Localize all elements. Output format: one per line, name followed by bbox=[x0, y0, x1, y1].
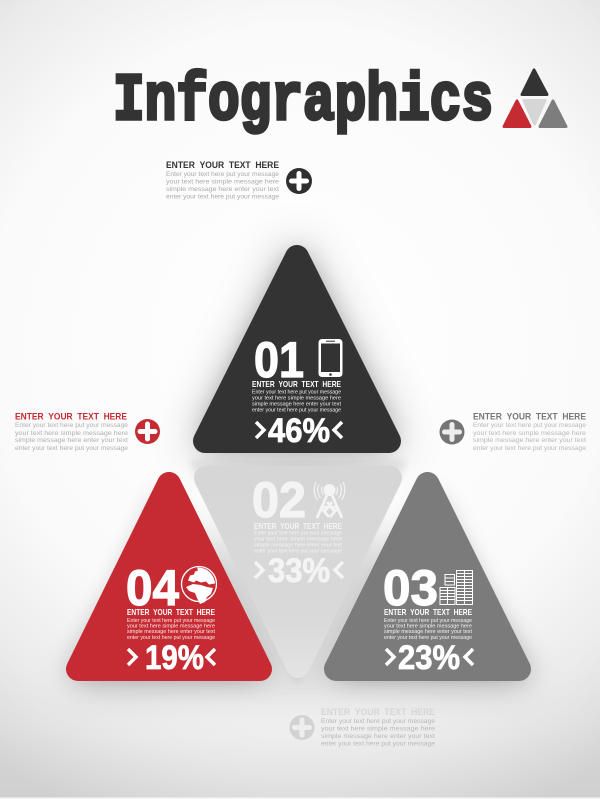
callout text: simple message here enter your text bbox=[321, 733, 435, 740]
panel text: Enter your text here put your message bbox=[252, 390, 341, 396]
soft shadows behind triangles bbox=[60, 235, 540, 690]
panel 02: light triangle bbox=[206, 472, 390, 666]
callout text: simple message here enter your text bbox=[15, 437, 128, 444]
callout text: Enter your text here put your message bbox=[15, 422, 129, 429]
panel 04: red triangle bbox=[78, 484, 260, 677]
icon: smartphone bbox=[318, 339, 342, 377]
icon: plus bbox=[135, 419, 160, 444]
callout text: your text here simple message here bbox=[166, 178, 280, 186]
icon: plus bbox=[290, 715, 314, 740]
panel text: Enter your text here put your message bbox=[384, 618, 472, 624]
callout heading: ENTER YOUR TEXT HERE bbox=[473, 412, 586, 422]
icon: plus bbox=[440, 420, 464, 444]
callout text: your text here simple message here bbox=[473, 430, 587, 437]
callout text: enter your text here put your message bbox=[166, 194, 280, 200]
panel text: enter your text here put your message bbox=[254, 548, 342, 554]
panel 03: grey triangle bbox=[336, 484, 519, 677]
callout: top bbox=[166, 160, 312, 200]
callout: bottom bbox=[290, 707, 436, 748]
icon: buildings bbox=[440, 570, 472, 604]
callout text: enter your text here put your message bbox=[321, 740, 436, 748]
number 03: 03 bbox=[383, 560, 438, 616]
panel text bbox=[127, 618, 215, 641]
percentage 33: 33% bbox=[268, 552, 330, 590]
callout: left bbox=[15, 412, 160, 452]
callout text: your text here simple message here bbox=[321, 726, 436, 732]
logo: four small triangles bbox=[504, 70, 566, 126]
panel 01: dark triangle bbox=[205, 257, 389, 450]
percentage 46: 46% bbox=[268, 412, 330, 450]
panel text: enter your text here put your message bbox=[384, 635, 472, 641]
panel text: simple message here enter your text bbox=[384, 629, 472, 635]
panel heading: ENTER YOUR TEXT HERE bbox=[384, 607, 472, 617]
number 04: 04 bbox=[126, 560, 179, 616]
panel heading: ENTER YOUR TEXT HERE bbox=[127, 607, 215, 617]
panel text bbox=[254, 530, 342, 554]
callout text bbox=[321, 718, 436, 748]
callout: right bbox=[440, 412, 587, 452]
callout heading: ENTER YOUR TEXT HERE bbox=[15, 412, 127, 422]
callout text: Enter your text here put your message bbox=[321, 718, 436, 725]
callout heading: ENTER YOUR TEXT HERE bbox=[321, 707, 435, 718]
panel text: enter your text here put your message bbox=[127, 635, 215, 641]
callout text: enter your text here put your message bbox=[15, 445, 129, 452]
panel text: simple message here enter your text bbox=[252, 402, 341, 408]
icon: globe bbox=[182, 566, 216, 604]
panel text: your text here simple message here bbox=[252, 396, 341, 402]
percentage 23: 23% bbox=[398, 639, 460, 677]
icon: radio tower bbox=[314, 482, 345, 518]
callout text bbox=[473, 422, 587, 452]
number 01: 01 bbox=[254, 332, 304, 388]
panel text: simple message here enter your text bbox=[254, 542, 342, 548]
panel heading: ENTER YOUR TEXT HERE bbox=[254, 521, 342, 531]
callout text: simple message here enter your text bbox=[166, 186, 279, 193]
callout text bbox=[15, 422, 129, 452]
number 02: 02 bbox=[252, 472, 306, 528]
callout text: Enter your text here put your message bbox=[473, 422, 587, 429]
callout text bbox=[166, 171, 280, 200]
panel text bbox=[384, 618, 472, 641]
callout text: enter your text here put your message bbox=[473, 445, 587, 452]
panel text: your text here simple message here bbox=[254, 536, 342, 542]
icon: plus bbox=[286, 168, 312, 194]
callout text: simple message here enter your text bbox=[473, 437, 586, 444]
panel text: your text here simple message here bbox=[384, 624, 472, 630]
panel text: Enter your text here put your message bbox=[127, 618, 215, 624]
callout text: your text here simple message here bbox=[15, 430, 129, 437]
title: Infographics bbox=[113, 64, 493, 140]
panel text: simple message here enter your text bbox=[127, 629, 215, 635]
panel text: enter your text here put your message bbox=[252, 408, 341, 414]
panel text: Enter your text here put your message bbox=[254, 530, 342, 536]
panel text: your text here simple message here bbox=[127, 624, 215, 630]
callout text: Enter your text here put your message bbox=[166, 171, 280, 178]
percentage 19: 19% bbox=[145, 639, 204, 677]
panel text bbox=[252, 390, 341, 414]
callout heading: ENTER YOUR TEXT HERE bbox=[166, 160, 279, 171]
panel heading: ENTER YOUR TEXT HERE bbox=[252, 379, 341, 389]
